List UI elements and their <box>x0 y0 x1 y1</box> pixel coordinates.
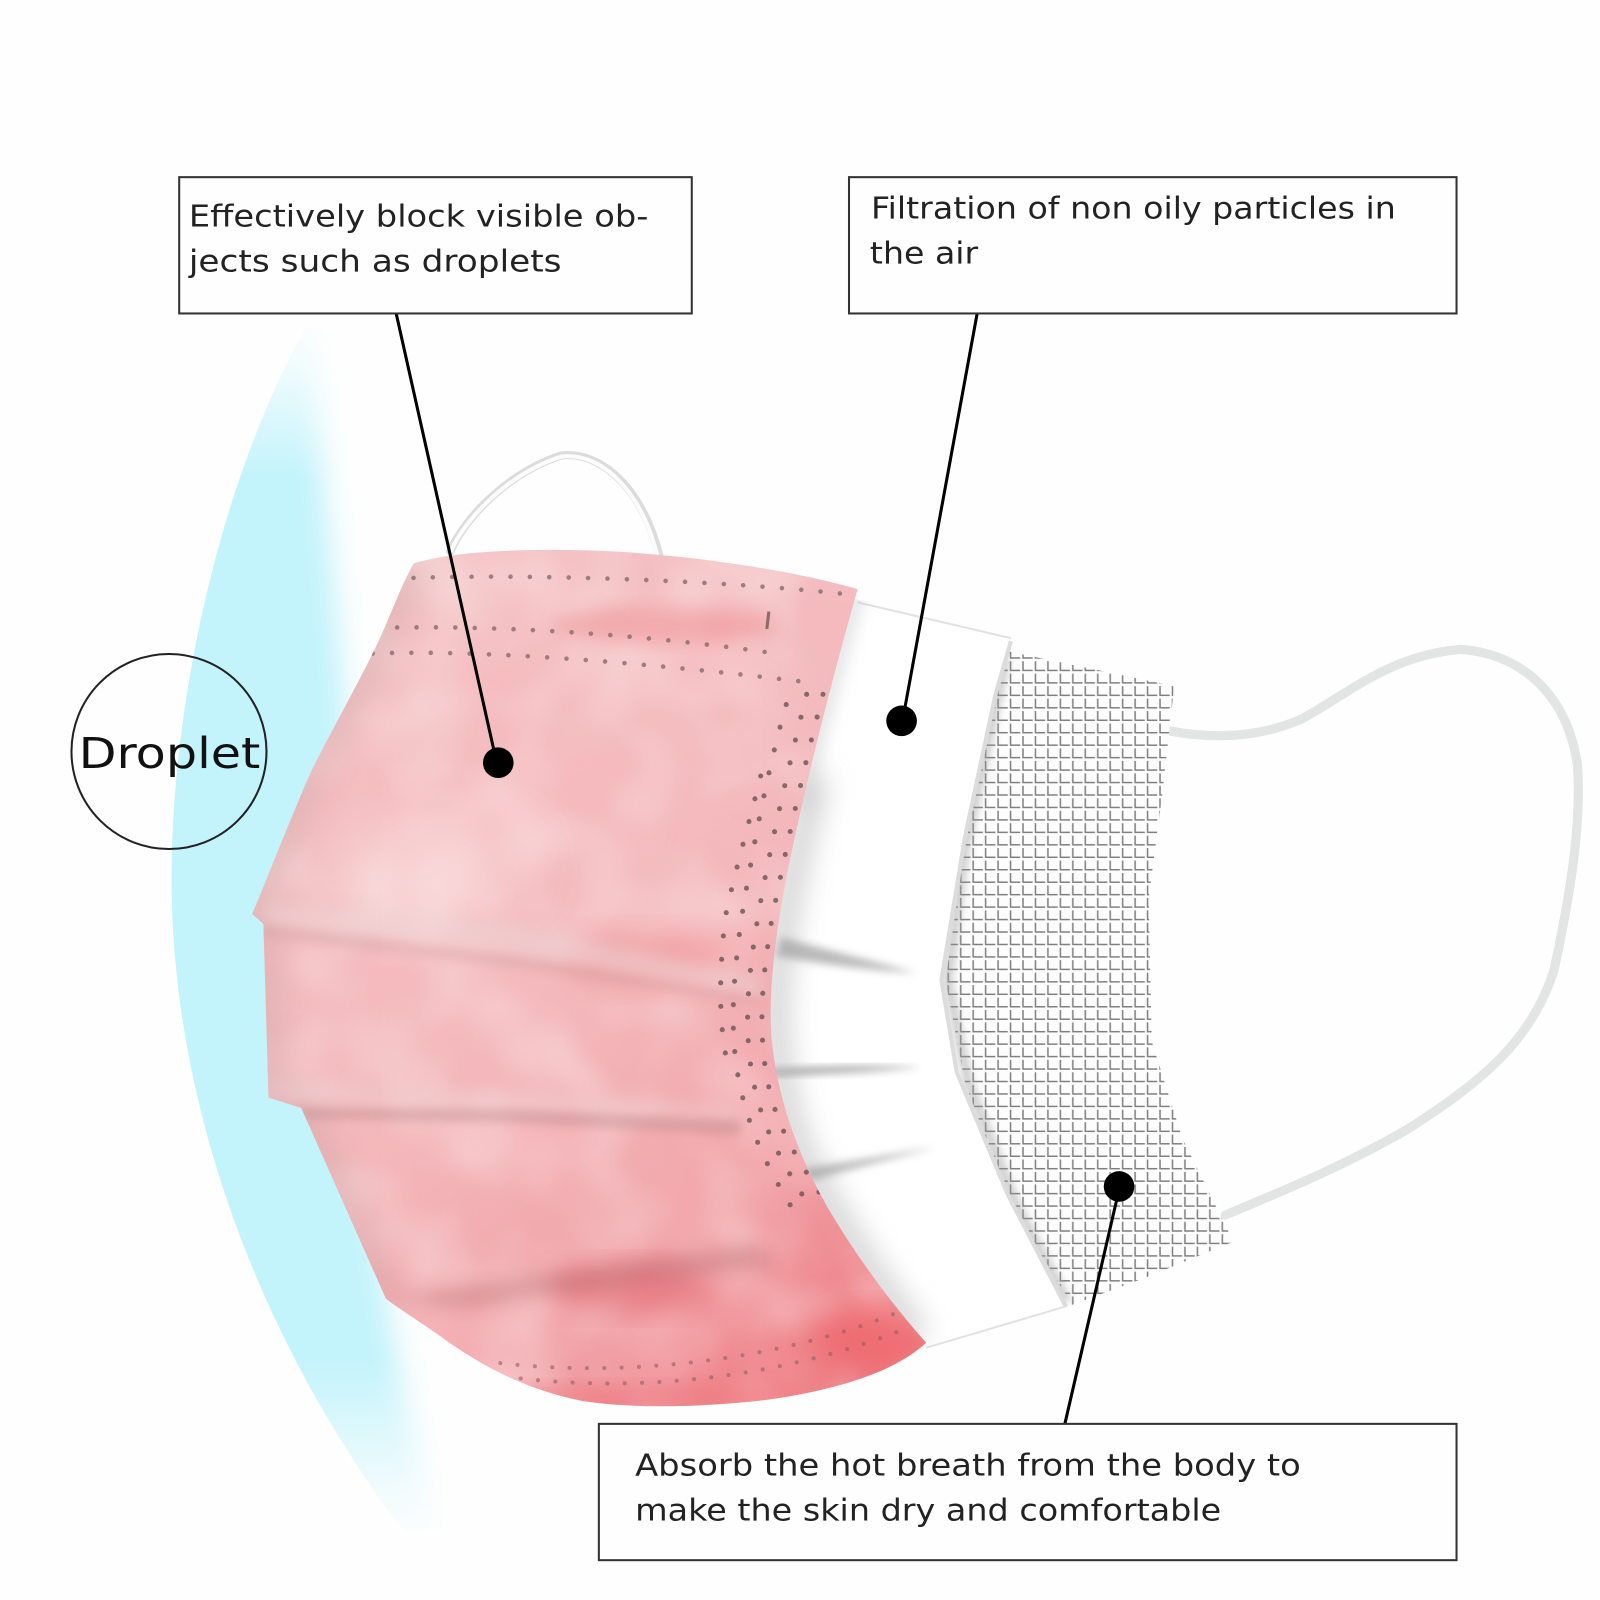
callout 3: line and dot on mesh layer <box>1065 1171 1134 1423</box>
blue droplet barrier arc <box>153 255 919 1593</box>
mesh inner layer: absorbent grey grid <box>946 651 1233 1305</box>
text box: block droplets: Effectively block visible ob- <box>189 200 648 235</box>
callout 1: line and dot on pink layer <box>396 313 514 778</box>
right stitch columns <box>721 694 827 1215</box>
pink outer layer <box>245 541 939 1419</box>
fold shadows <box>776 937 916 973</box>
text box: absorb breath: Absorb the hot breath from the body to <box>635 1448 1301 1483</box>
shadow beside the pink layer <box>776 776 919 1338</box>
icon: back ear loop <box>450 455 660 556</box>
text box: absorb breath <box>599 1424 1457 1560</box>
top stitch rows <box>373 577 847 682</box>
text box: block droplets <box>179 177 692 313</box>
text box: absorb breath: make the skin dry and comfortable <box>635 1493 1221 1528</box>
label: droplet circle: Droplet <box>79 729 260 779</box>
muted left rim <box>252 564 414 1299</box>
bottom stitch rows <box>500 1312 909 1383</box>
mottled colour <box>666 1314 808 1388</box>
callout 2: line and dot on white layer <box>886 313 977 736</box>
text box: filtration <box>849 177 1457 313</box>
white middle filter layer <box>770 600 1068 1348</box>
fold lines <box>263 904 761 996</box>
text box: filtration: the air <box>870 236 979 271</box>
label: droplet circle <box>71 654 266 849</box>
small seam mark <box>767 612 769 629</box>
icon: right ear loop <box>1170 649 1578 1215</box>
text box: filtration: Filtration of non oily particles in <box>871 192 1396 227</box>
text box: block droplets: jects such as droplets <box>188 245 562 280</box>
